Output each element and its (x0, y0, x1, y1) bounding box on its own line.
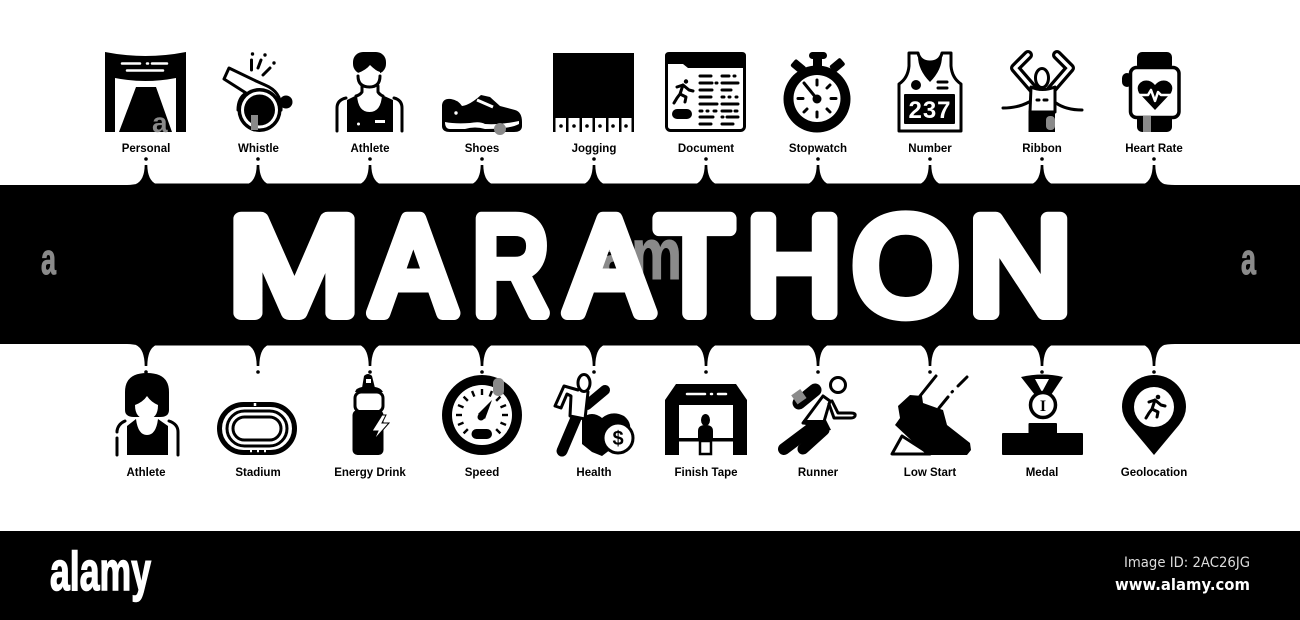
title: N (969, 190, 1072, 343)
label: Speed: Speed (465, 467, 499, 479)
icon: stadium (220, 403, 294, 452)
central black band (0, 184, 1300, 346)
icon: medal podium: I (1040, 398, 1046, 415)
icon: low start (892, 376, 971, 455)
label: Number: Number (908, 143, 952, 155)
label: Finish Tape: Finish Tape (674, 467, 738, 479)
footer image id: Image ID: 2AC26JG (1124, 555, 1250, 571)
icon: speedometer (442, 375, 522, 455)
label: Stopwatch: Stopwatch (789, 143, 847, 155)
icon: whistle (224, 52, 292, 132)
title: A (372, 190, 455, 343)
icon: personal gate (105, 52, 186, 138)
icon: runner (784, 378, 855, 449)
label: Health: Health (576, 467, 612, 479)
title: O (853, 190, 958, 343)
footer logo: alamy (50, 540, 151, 602)
icon: geolocation pin (1122, 375, 1186, 455)
title: A (567, 190, 652, 343)
footer website: www.alamy.com (1115, 575, 1250, 594)
icon: heart rate watch (1122, 52, 1179, 132)
label: Medal: Medal (1026, 467, 1058, 479)
label: Runner: Runner (798, 467, 839, 479)
icon: health runner (555, 374, 633, 456)
label: Personal: Personal (122, 143, 170, 155)
title: M (228, 190, 360, 343)
icon: personal gate: a (152, 107, 168, 138)
bottom connectors (136, 345, 1164, 374)
icon: medal podium (1002, 374, 1083, 455)
icon: number bib (899, 53, 961, 131)
icon: health runner: $ (612, 428, 624, 450)
icon: female athlete (117, 373, 178, 455)
watermark in band: a (41, 235, 56, 284)
icon: shoes (442, 95, 522, 135)
label: Ribbon: Ribbon (1022, 143, 1062, 155)
icon: ribbon finisher (1003, 55, 1082, 132)
label: Energy Drink: Energy Drink (334, 467, 406, 479)
footer strip (0, 531, 1300, 620)
label: Low Start: Low Start (904, 467, 956, 479)
icon: jogging mat (553, 53, 634, 132)
watermark in band: am (599, 215, 682, 295)
icon: document (665, 52, 746, 130)
title: T (656, 190, 733, 343)
title: R (472, 190, 549, 343)
watermark in band: a (1241, 235, 1256, 284)
icon: athlete (337, 52, 402, 132)
label: Document: Document (678, 143, 734, 155)
icon: number bib: 237 (908, 97, 952, 124)
icon: finish tape gate (665, 384, 747, 455)
label: Whistle: Whistle (238, 143, 279, 155)
label: Jogging: Jogging (572, 143, 616, 155)
label: Athlete: Athlete (127, 467, 165, 479)
label: Geolocation: Geolocation (1121, 467, 1187, 479)
label: Shoes: Shoes (465, 143, 499, 155)
icon: energy drink (352, 374, 389, 455)
icon: stopwatch (784, 52, 850, 132)
top connectors (136, 157, 1164, 184)
title: H (746, 190, 842, 343)
label: Heart Rate: Heart Rate (1125, 143, 1183, 155)
label: Athlete: Athlete (351, 143, 389, 155)
watermark in band (41, 215, 1256, 295)
label: Stadium: Stadium (235, 467, 281, 479)
